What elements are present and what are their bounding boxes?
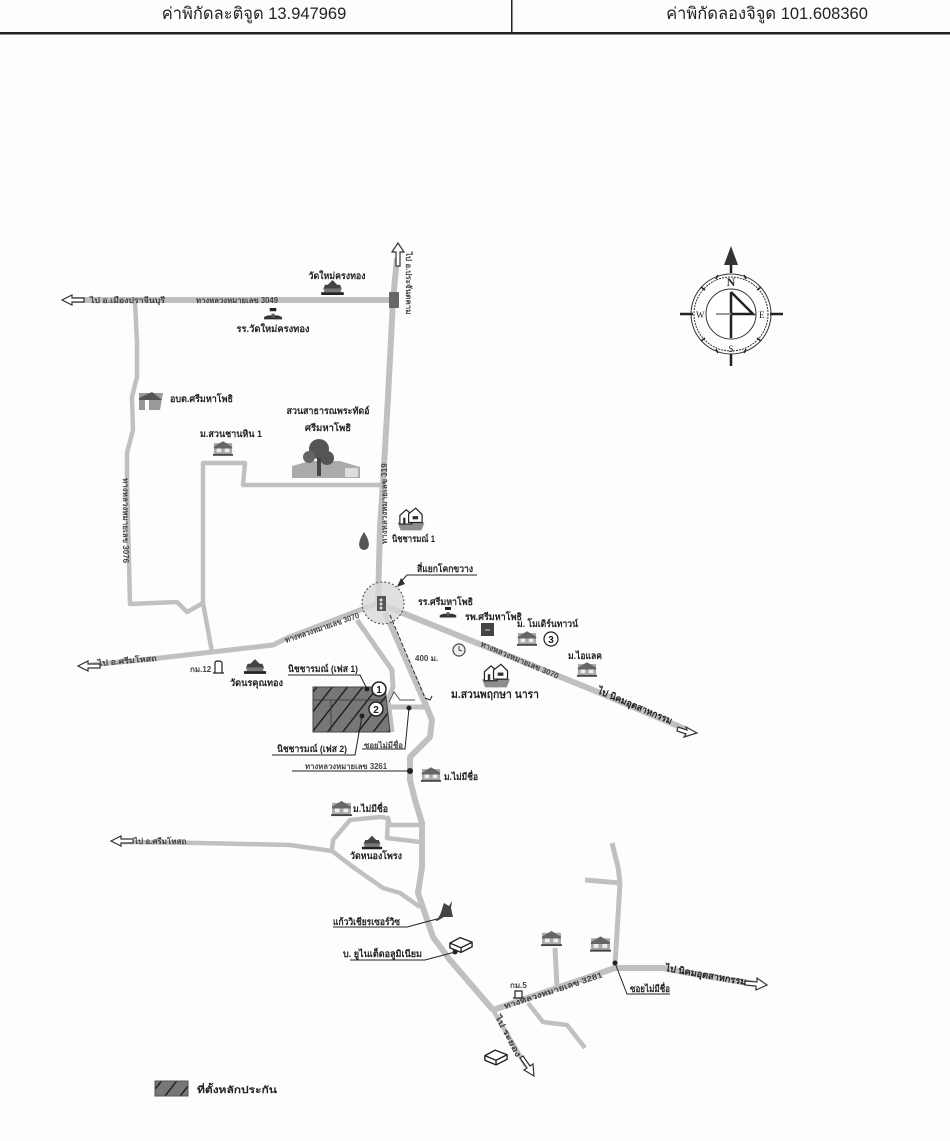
road arrows [62, 243, 767, 1076]
label: sub-district office: อบต.ศรีมหาโพธิ [170, 393, 233, 405]
marker 3 [544, 632, 558, 646]
marker 2: 2 [373, 705, 379, 716]
north road labels: ไป อ.ประจันตคาม [404, 251, 414, 314]
marker 1 [372, 682, 386, 696]
compass: E [759, 310, 765, 320]
label: Nitcharom phase 2 [272, 716, 362, 755]
label: highway 3070 west: ทางหลวงหมายเลข 3070 [284, 611, 361, 645]
icon: unnamed village 2 [331, 801, 352, 816]
icon: park tree [292, 439, 360, 478]
compass: N [727, 275, 736, 289]
label: hospital: รพ.ศรีมหาโพธิ [465, 611, 522, 623]
icon: km 5 marker: กม.5 [510, 981, 527, 990]
label: unnamed soi [362, 706, 412, 750]
label: Kaew Wichian service: แก้ววิเชียรเซอร์วิซ [333, 916, 400, 928]
icon: fuel station drop [359, 532, 369, 550]
label: Wat Nong Phrong: วัดหนองโพรง [350, 850, 402, 862]
icon: km 12 marker [213, 661, 224, 673]
label: road going south: ไป ระยอง [493, 1012, 524, 1059]
label: unnamed village 2: ม.ไม่มีชื่อ [353, 801, 388, 815]
coordinates table header [0, 0, 950, 34]
label: unnamed village: ม.ไม่มีชื่อ [444, 769, 478, 783]
label: km 12: กม.12 [190, 665, 212, 674]
label: junction name [397, 561, 477, 587]
label: to industrial estate: ไป นิคมอุตสาหกรรม [595, 684, 674, 727]
icon: school Wat Mai [264, 308, 282, 319]
icon: factory [450, 938, 472, 952]
label: unnamed soi east: ซอยไม่มีชื่อ [630, 981, 670, 995]
marker 1: 1 [376, 685, 382, 696]
label: west road destination: ไป อ.ศรีมโหสถ [133, 836, 186, 846]
north road labels [89, 251, 414, 335]
dimension: 400 m: 400 ม. [415, 654, 438, 663]
label: to Si Mahosot: ไป อ.ศรีมโหสถ [96, 653, 157, 668]
label: Suan Phruksa Nara: ม.สวนพฤกษา นารา [451, 689, 539, 701]
label: village Suan Chan Hin 1: ม.สวนชานหิน 1 [200, 429, 263, 440]
vertical main road label: ทางหลวงหมายเลข 319 [380, 463, 389, 544]
compass [680, 246, 783, 366]
label: Wat Nara Khun Thong: วัดนรคุณทอง [230, 678, 283, 689]
label: Modern Town village: ม. โมเดิร์นทาวน์ [517, 618, 578, 630]
icon: sub-district office [139, 392, 163, 410]
dimension: 400 m [390, 615, 438, 700]
small clock marker [453, 644, 465, 656]
longitude value: ค่าพิกัดลองจิจูด 101.608360 [666, 5, 868, 24]
label: highway 3070 east: ทางหลวงหมายเลข 3070 [479, 640, 561, 681]
label: United Aluminium company: บ. ยูไนเต็ดอลูมิเนียม [343, 947, 422, 961]
icon: Modern Town village [517, 631, 537, 646]
icon: village east 2 [590, 936, 611, 952]
legend: ที่ตั้งหลักประกัน [197, 1082, 278, 1096]
icon: km 5 marker [510, 981, 527, 998]
icon: school Sri Maha Pho [440, 607, 456, 618]
label: Nitcharom phase 2: นิชชารมณ์ (เฟส 2) [277, 743, 347, 755]
icon: factory south [485, 1050, 507, 1065]
label: highway 3261 [292, 762, 413, 774]
compass: W [696, 310, 705, 320]
label: United Aluminium company [343, 947, 458, 961]
icon: unnamed village [421, 767, 441, 782]
label: highway 3281: ทางหลวงหมายเลข 3281 [503, 970, 604, 1011]
latitude value: ค่าพิกัดละติจูด 13.947969 [162, 5, 346, 24]
site: hatched area [313, 686, 390, 732]
label: school Sri Maha Pho: รร.ศรีมหาโพธิ [418, 596, 473, 608]
label: Kaew Wichian service [333, 916, 437, 928]
label: Nitcharom phase 1 [288, 663, 367, 689]
junction circle: Khok Khwang intersection [362, 582, 404, 624]
icon: service leaf [435, 901, 453, 921]
label: to industrial estate east: ไป นิคมอุตสาหกรรม [664, 962, 747, 988]
icon: Suan Phruksa Nara houses [482, 664, 510, 687]
label: unnamed soi east [612, 960, 670, 995]
legend [155, 1081, 278, 1096]
icon: village at far right [577, 662, 597, 677]
icon: Wat Nong Phrong [362, 836, 382, 849]
icon: Wat Nara Khun Thong [244, 659, 266, 674]
marker 2 [369, 702, 383, 716]
icon: village east 1 [541, 931, 562, 946]
compass: S [728, 344, 734, 354]
label: Nitcharom phase 1: นิชชารมณ์ (เฟส 1) [288, 663, 358, 675]
label: public park: ศรีมหาโพธิ [305, 422, 351, 434]
icon: temple Wat Mai Krong Thong [321, 280, 344, 295]
icon: village Suan Chan Hin 1 [213, 441, 233, 456]
vertical left road label: ทางหลวงหมายเลข 3076 [121, 478, 130, 564]
traffic light north [389, 292, 399, 308]
icon: Nitcharom 1 houses [398, 508, 424, 530]
north road labels: ทางหลวงหมายเลข 3049 [196, 296, 279, 305]
label: village at far right: ม.ไอแลค [568, 650, 602, 662]
label: junction name: สี่แยกโคกขวาง [417, 561, 473, 575]
marker 3: 3 [548, 635, 554, 646]
label: Nitcharom 1: นิชชารมณ์ 1 [392, 533, 436, 545]
north road labels: ไป อ.เมืองปราจีนบุรี [89, 295, 166, 306]
north road labels: วัดใหม่ครงทอง [308, 270, 366, 282]
icon: small hill [389, 692, 415, 702]
label: unnamed soi: ซอยไม่มีชื่อ [364, 739, 403, 750]
road network [73, 258, 755, 1066]
icon: hospital [481, 623, 494, 636]
north road labels: รร.วัดใหม่ครงทอง [236, 323, 310, 335]
label: public park [286, 405, 370, 434]
label: public park: สวนสาธารณพระทัดอ์ [286, 405, 370, 417]
label: highway 3261: ทางหลวงหมายเลข 3261 [305, 762, 388, 771]
